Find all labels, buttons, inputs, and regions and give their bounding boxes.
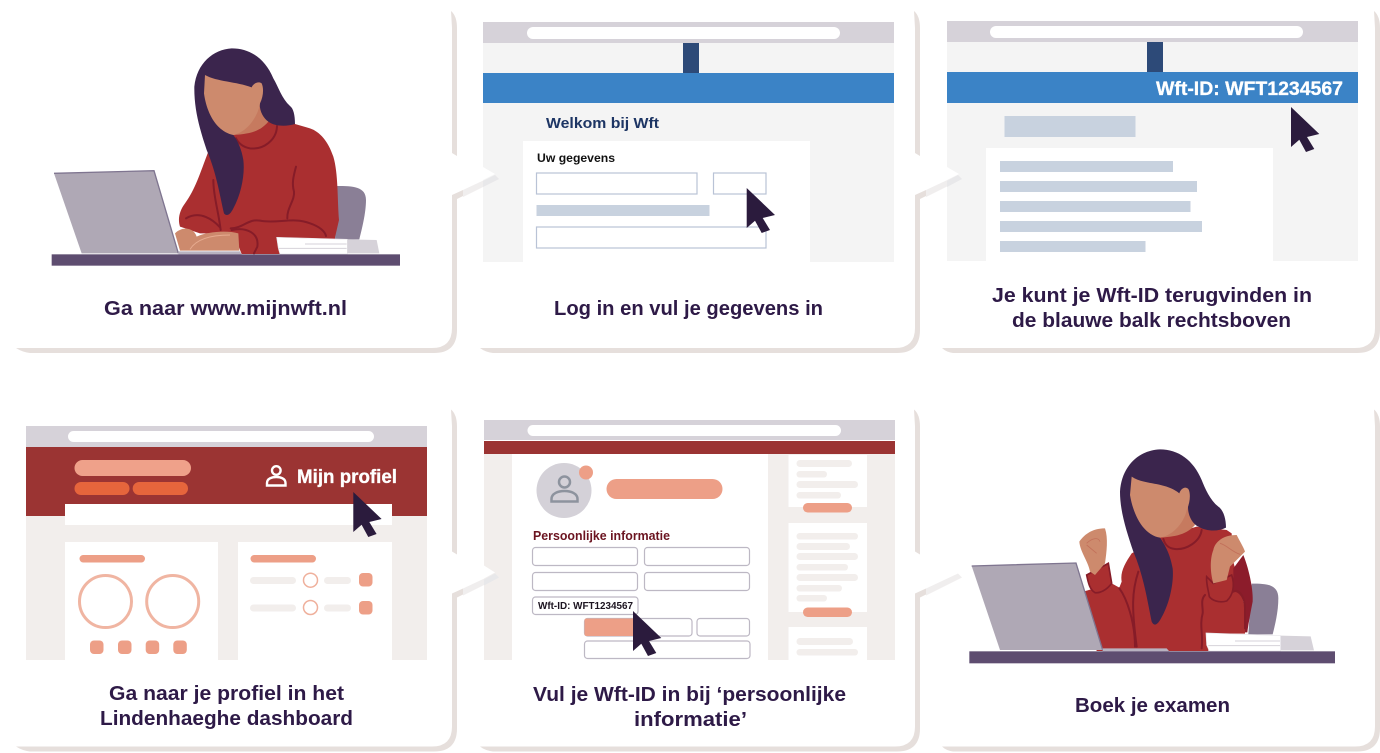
arrow: step 4 to 5 bbox=[463, 566, 499, 596]
caption: step 4: Ga naar je profiel in het bbox=[109, 683, 344, 705]
card: right dashboard bbox=[238, 542, 392, 660]
arrow: step 1 to 2 bbox=[463, 167, 499, 197]
illustration: woman celebrating at laptop bbox=[969, 449, 1335, 663]
arrow: step 5 to 6 bbox=[926, 574, 962, 596]
icon: person bbox=[267, 466, 286, 486]
sidebar cards bbox=[788, 455, 867, 660]
panel: step 5 personal information bbox=[480, 410, 926, 752]
form fields bbox=[532, 548, 750, 658]
panel: step 5 personal information: informatie’ bbox=[634, 709, 747, 731]
caption: step 3: Je kunt je Wft-ID terugvinden in bbox=[992, 285, 1312, 307]
card: left dashboard bbox=[65, 542, 218, 660]
panel: step 6 book exam bbox=[942, 410, 1380, 752]
panel: step 4 profile: Lindenhaeghe dashboard bbox=[100, 708, 353, 730]
icon: cursor bbox=[747, 188, 775, 233]
form fields: Wft-ID: WFT1234567 bbox=[538, 601, 633, 612]
illustration: woman typing at laptop bbox=[52, 48, 400, 266]
label: Mijn profiel: Mijn profiel bbox=[297, 467, 397, 488]
icon: avatar bbox=[536, 463, 593, 518]
label: Wft-ID in blue bar: Wft-ID: WFT1234567 bbox=[1156, 79, 1343, 100]
panel: step 4 profile bbox=[16, 410, 463, 752]
icon: cursor bbox=[633, 611, 661, 656]
form panel: Uw gegevens bbox=[537, 153, 615, 165]
panel: step 1 go to website bbox=[16, 11, 463, 353]
arrow: step 2 to 3 bbox=[926, 167, 962, 197]
caption: step 2: Log in en vul je gegevens in bbox=[554, 298, 823, 320]
panel: step 3 find Wft-ID bbox=[942, 11, 1380, 353]
icon: cursor bbox=[1291, 107, 1319, 152]
icon: cursor bbox=[353, 492, 382, 537]
panel: step 2 log in bbox=[480, 11, 926, 353]
form panel bbox=[523, 141, 810, 262]
panel: step 3 find Wft-ID: de blauwe balk rechtsboven bbox=[1012, 310, 1291, 332]
heading: personal information: Persoonlijke informatie bbox=[533, 529, 670, 543]
heading: welcome: Welkom bij Wft bbox=[546, 115, 659, 132]
caption: step 5: Vul je Wft-ID in bij ‘persoonlijke bbox=[533, 684, 846, 706]
caption: step 1: Ga naar www.mijnwft.nl bbox=[104, 298, 347, 320]
content panel bbox=[986, 148, 1273, 261]
caption: step 6: Boek je examen bbox=[1075, 695, 1230, 717]
